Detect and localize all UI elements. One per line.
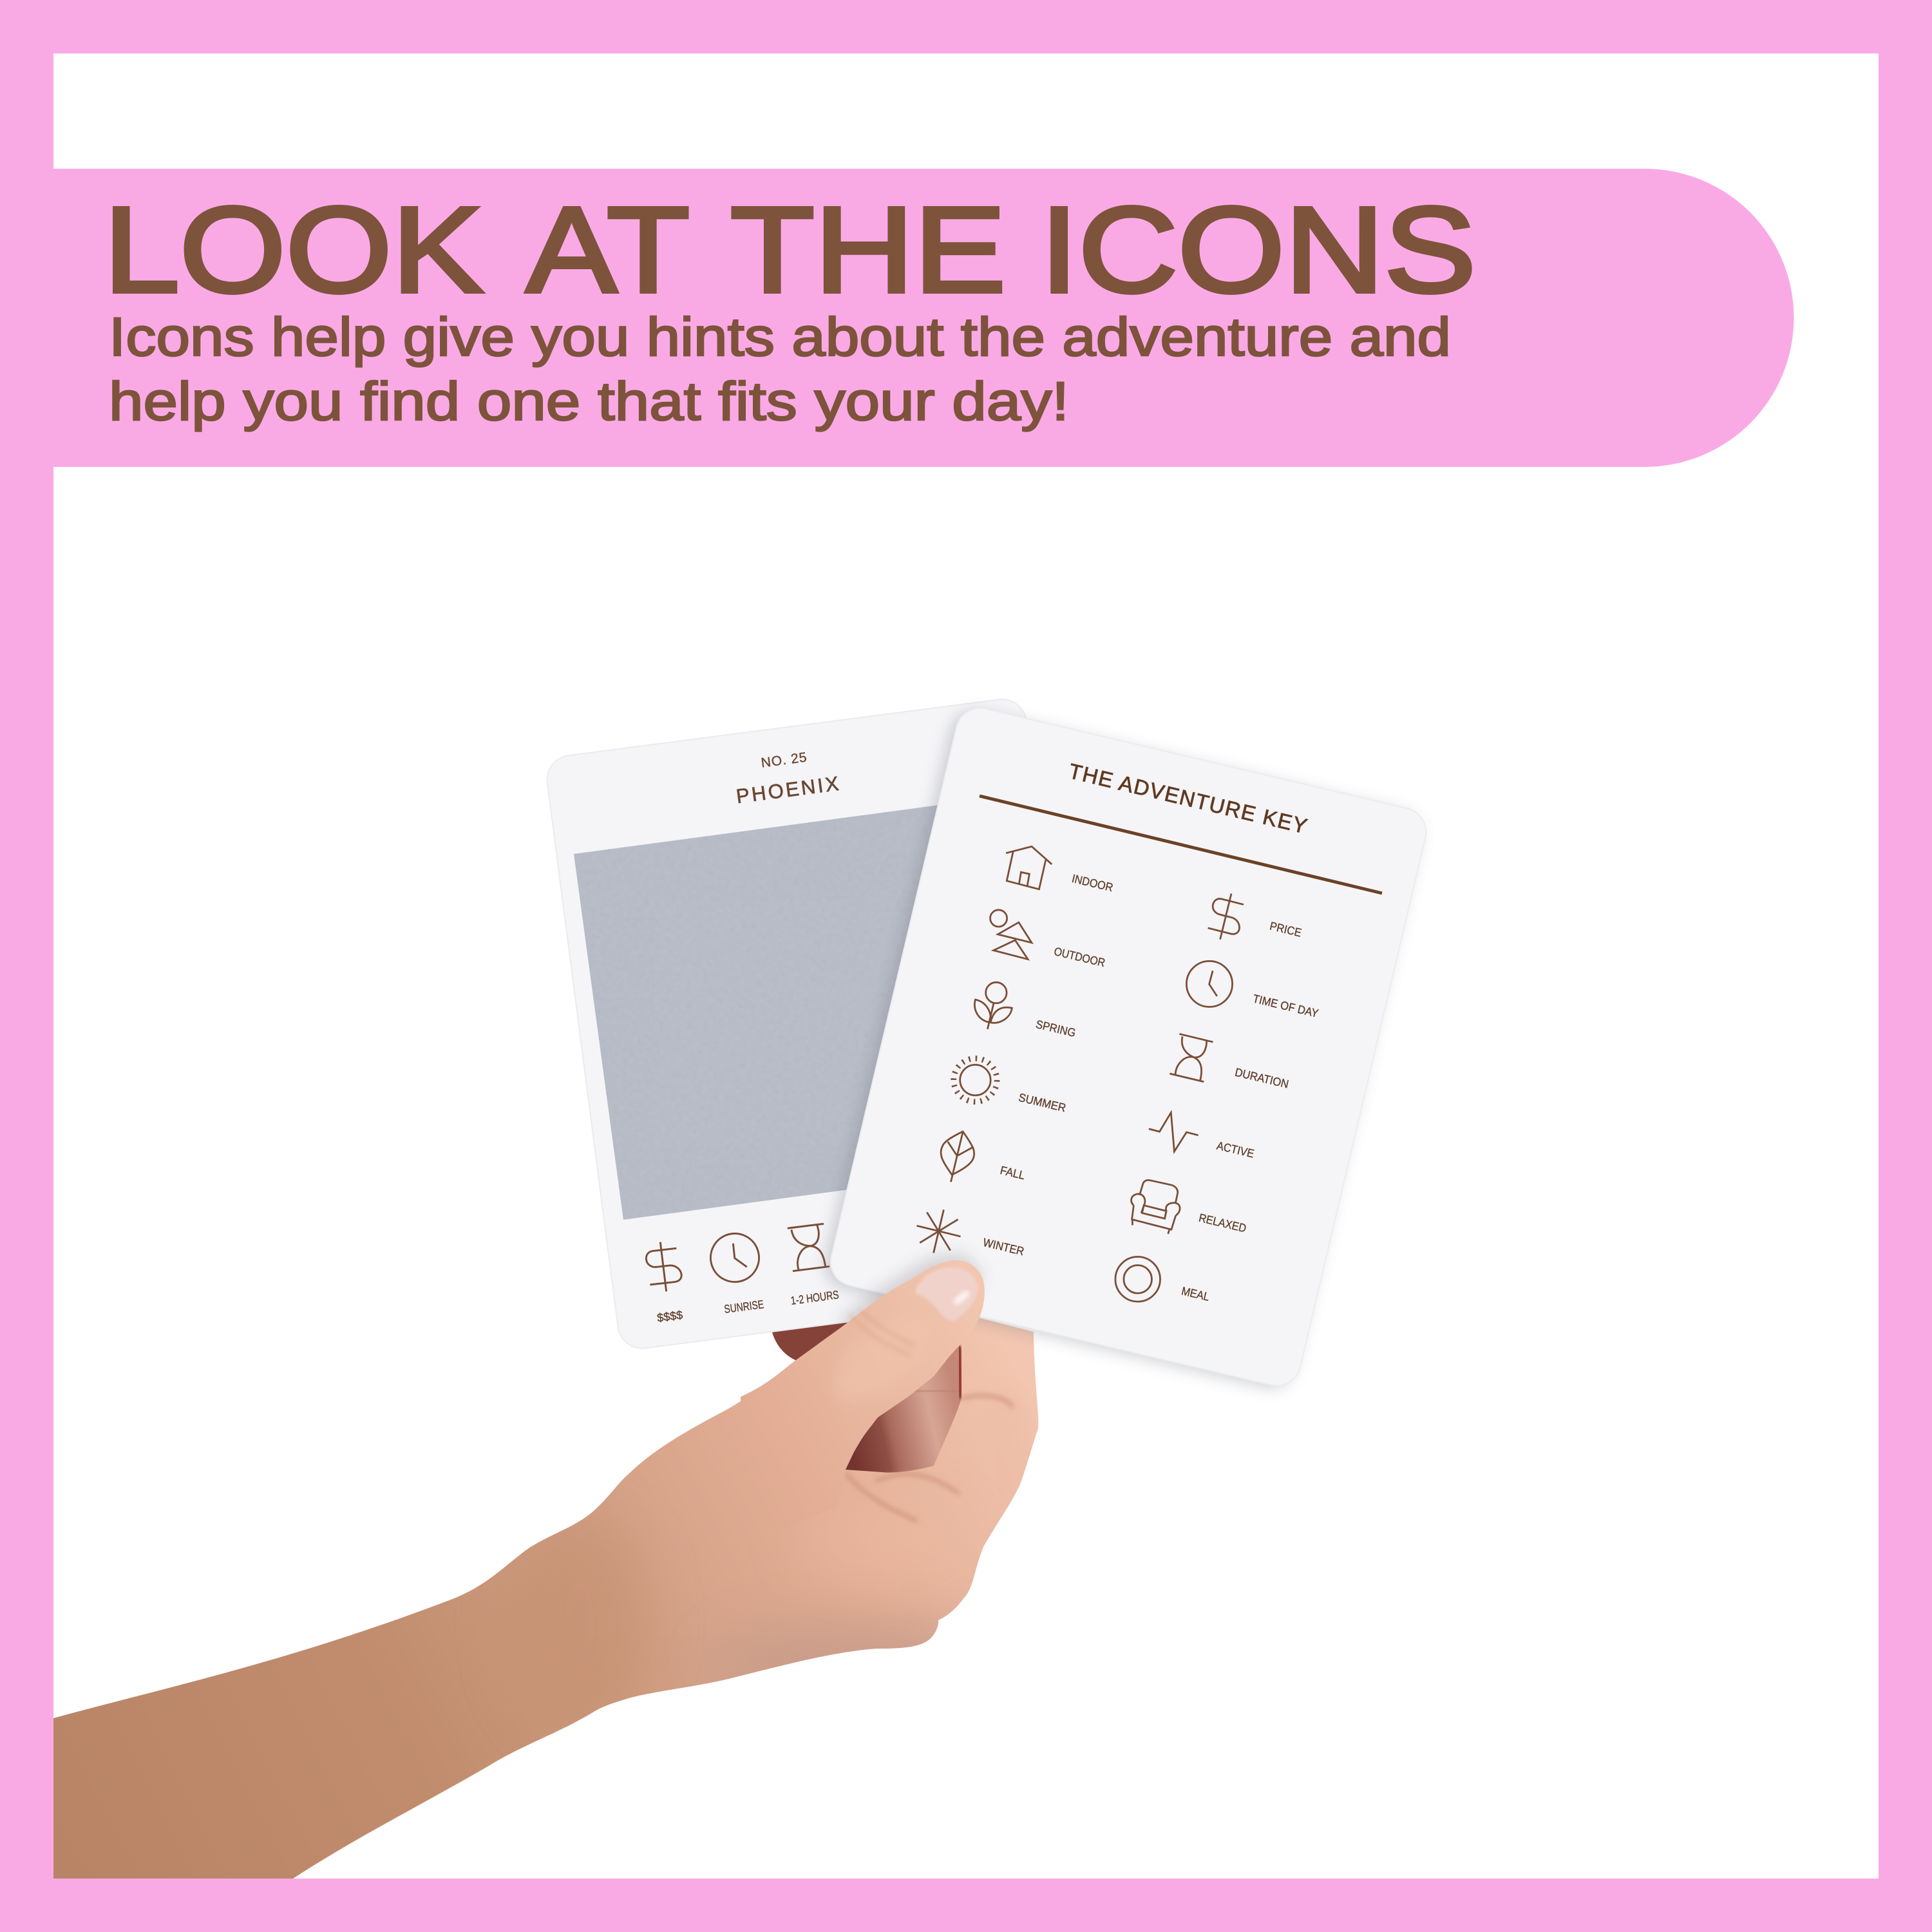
card surface (826, 703, 1431, 1390)
thumb knuckle creases (850, 1311, 914, 1356)
label: relaxed: RELAXED (1198, 1211, 1247, 1235)
thumb highlight (819, 1300, 946, 1417)
icon: duration (1170, 1034, 1213, 1082)
panel: back card (546, 699, 1027, 1349)
label: fall: FALL (999, 1164, 1027, 1182)
icon: clock (704, 1227, 766, 1289)
title (104, 182, 1476, 318)
finger behind cards (770, 1301, 866, 1361)
icon: hourglass (778, 1216, 838, 1279)
subtitle: help you find one that fits your day! (109, 371, 1069, 431)
icon group B (916, 982, 1180, 1302)
label: active: ACTIVE (1215, 1139, 1255, 1160)
label: meal: MEAL (1180, 1284, 1211, 1303)
icon: price (1208, 894, 1244, 940)
label: outdoor: OUTDOOR (1053, 945, 1106, 969)
icon: fall (941, 1132, 974, 1182)
icon: active (1149, 1113, 1198, 1151)
front card shadow (820, 706, 1425, 1393)
thumbnail (916, 1267, 978, 1320)
left and right icon group A (990, 846, 1244, 1151)
nail highlight (955, 1293, 968, 1303)
icon: price (637, 1238, 690, 1296)
icon: summer (954, 1059, 997, 1102)
key heading: THE ADVENTURE KEY (1066, 759, 1309, 838)
palm shading (509, 1391, 1034, 1732)
label: indoor: INDOOR (1070, 872, 1114, 894)
thumb shadow on cards (837, 1253, 985, 1346)
palm fold (846, 1396, 1012, 1521)
panel: adventure key card (826, 703, 1431, 1390)
icon: spring (974, 982, 1012, 1029)
finger crease (960, 1346, 961, 1399)
gap between thumb and fingers (846, 1345, 961, 1472)
label: price: $$$$ (656, 1309, 683, 1325)
icon: relaxed (1132, 1180, 1180, 1234)
hand: arm, palm and index finger (53, 1301, 1038, 1879)
thumb (741, 1260, 985, 1546)
label: summer: SUMMER (1018, 1091, 1067, 1115)
card title: PHOENIX (735, 772, 840, 808)
title: LOOK (104, 182, 483, 318)
icon: house (1006, 846, 1052, 889)
label: price: PRICE (1269, 920, 1303, 940)
title: ICONS (1040, 182, 1476, 318)
title: THE (730, 182, 1006, 318)
card number: NO. 25 (760, 750, 808, 771)
label: time of day: TIME OF DAY (1251, 992, 1320, 1020)
label: duration: 1-2 HOURS (790, 1288, 840, 1307)
grey photo placeholder (574, 805, 938, 1220)
subtitle: Icons help give you hints about the adventure and (109, 307, 1451, 367)
header banner (53, 169, 1794, 467)
icon: outdoor (990, 910, 1032, 960)
icon: time of day (1186, 961, 1233, 1007)
key divider (980, 796, 1382, 893)
icon: winter (916, 1209, 961, 1253)
icon: meal (1115, 1257, 1160, 1302)
label: duration: DURATION (1234, 1066, 1290, 1091)
label: winter: WINTER (981, 1236, 1025, 1258)
label: time: SUNRISE (723, 1298, 764, 1316)
title: AT (526, 182, 690, 318)
card surface (544, 696, 1100, 1351)
label: spring: SPRING (1034, 1018, 1077, 1039)
subtitle (109, 307, 1451, 431)
